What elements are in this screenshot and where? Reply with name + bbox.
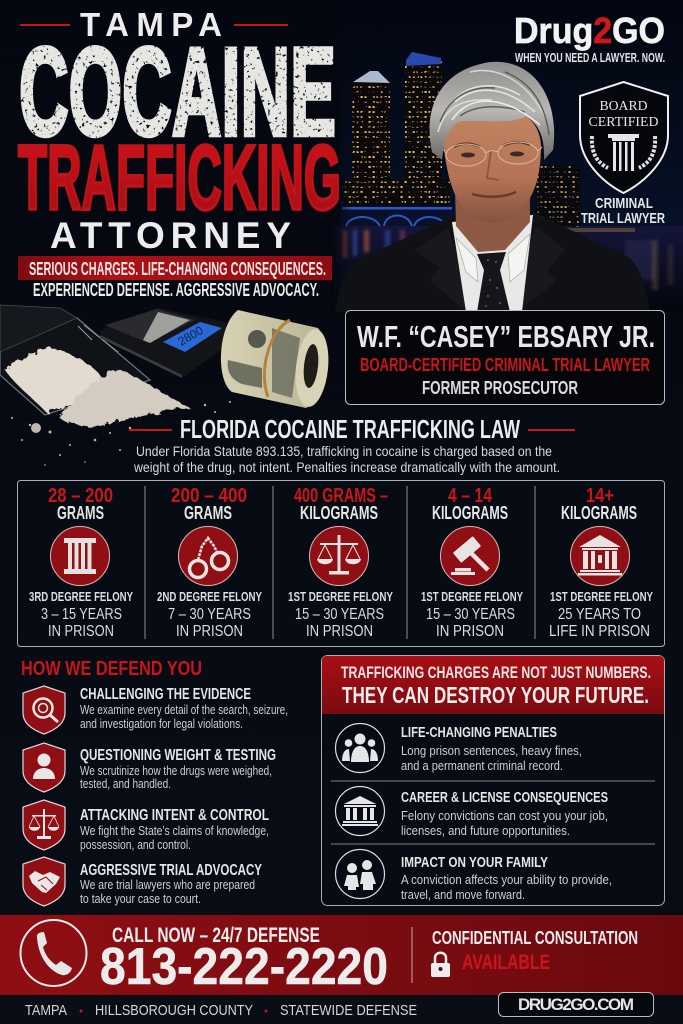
low buildings [342,165,635,232]
red tagline bar [18,256,332,280]
column: 400 grams-4 kilograms: 1ST DEGREE FELONY [288,589,393,604]
column: 400 grams-4 kilograms: KILOGRAMS [300,503,378,523]
logo: Drug2GO: Drug2GO [514,10,665,51]
defense item: challenging the evidence: We examine every detail of the search, seizure, [80,703,288,717]
column: 4-14 kilograms: IN PRISON [436,623,504,640]
icon: shield person [23,743,65,792]
blue bridge [342,206,452,226]
column: 14+ kilograms: 14+ [586,485,614,507]
available: AVAILABLE [462,951,550,974]
icon: scales [310,526,368,586]
water reflection [330,226,683,312]
consequence: career and license [336,786,608,838]
shirt collar shadow [456,234,530,282]
icon: phone [20,920,86,986]
consequence: life-changing penalties: LIFE-CHANGING PENALTIES [401,725,557,741]
call-to-action band [0,915,683,996]
photo: cocaine bag, scale and cash [0,305,332,466]
panel header [322,656,664,714]
column: 28-200 grams: 28 – 200 [48,485,113,507]
plastic bag [0,305,150,415]
column: 28-200 grams: 3 – 15 YEARS [41,606,122,623]
column: 200-400 grams: 200 – 400 [171,485,247,507]
consequence: impact on family: A conviction affects your ability to provide, [401,873,612,887]
column: 14+ kilograms: LIFE IN PRISON [549,623,650,640]
column icon [608,134,639,171]
defense item: questioning weight and testing: tested, and handled. [80,777,171,791]
service areas: HILLSBOROUGH COUNTY [95,1002,253,1019]
column: 400 grams-4 kilograms: IN PRISON [306,623,373,640]
icon: institution building [336,786,384,836]
defense item: challenging the evidence [23,686,288,734]
badge caption: CRIMINAL [595,195,653,212]
defense item: aggressive trial advocacy [23,857,262,906]
defense item: questioning weight and testing [23,743,276,792]
ATTORNEY heading: ATTORNEY [50,215,291,256]
red tagline bar: SERIOUS CHARGES. LIFE-CHANGING CONSEQUENCES. [29,259,326,279]
photo: Tampa night skyline [330,0,683,312]
icon: handcuffs [178,526,238,586]
shirt [452,215,533,312]
digital scale [100,308,228,378]
jacket [335,213,650,312]
section: how we defend you [21,657,288,906]
column: 4-14 kilograms: 4 – 14 [448,485,493,507]
consequence: life-changing penalties: and a permanent criminal record. [401,759,563,773]
column: 14+ kilograms: 25 YEARS TO [558,606,641,623]
website button: DRUG2GO.COM [518,995,634,1014]
face [443,107,541,223]
defense item: aggressive trial advocacy: We are trial lawyers who are prepared [80,878,255,892]
icon: padlock [431,953,450,977]
column: 28-200 grams: GRAMS [57,503,104,523]
footer [25,992,654,1019]
consequence: career and license: licenses, and future opportunities. [401,824,570,838]
facial features [454,142,530,197]
column: 28-200 grams: 3RD DEGREE FELONY [29,589,133,604]
former prosecutor: FORMER PROSECUTOR [422,378,578,398]
attorney portrait [335,62,650,312]
column: 400 grams-4 kilograms: 15 – 30 YEARS [295,606,384,623]
service areas: TAMPA [25,1002,67,1019]
consequence: life-changing penalties: Long prison sentences, heavy fines, [401,744,582,758]
laurels [592,136,655,168]
icon: courthouse [570,526,630,586]
section intro: Under Florida Statute 893.135, trafficking in cocaine is charged based on the [136,443,552,459]
glasses [443,142,542,166]
hair [430,62,554,160]
section: Florida cocaine trafficking law [129,414,575,475]
icon: shield magnifier [23,686,65,734]
column: 200-400 grams: 2ND DEGREE FELONY [157,589,262,604]
defense item: attacking intent and control: possession, and control. [80,838,191,852]
digital scale: 2800 [176,323,206,349]
column: 4-14 kilograms: 1ST DEGREE FELONY [421,589,523,604]
defense item: questioning weight and testing: QUESTIONING WEIGHT & TESTING [80,747,276,764]
tower right [405,52,442,208]
call now label: CALL NOW – 24/7 DEFENSE [112,924,320,947]
cash roll [221,310,332,408]
badge: board certified shield: CERTIFIED [588,115,658,130]
column: 200-400 grams: IN PRISON [176,623,243,640]
column: 200-400 grams: 7 – 30 YEARS [168,606,251,623]
icon: jail bars [50,526,110,586]
title block [18,6,341,300]
phone number: 813-222-2220 [100,938,388,996]
powder specks [11,401,231,466]
column: 4-14 kilograms [421,485,523,640]
consequence: impact on family: travel, and move forward. [401,888,525,902]
panel: consequences [322,656,664,906]
column: 28-200 grams [29,485,133,640]
section heading: HOW WE DEFEND YOU [21,657,202,680]
TAMPA heading: TAMPA [80,6,222,43]
defense item: attacking intent and control: We fight the State’s claims of knowledge, [80,824,269,838]
column: 28-200 grams: IN PRISON [48,623,114,640]
section intro: weight of the drug, not intent. Penalties increase dramatically with the amount. [133,459,560,475]
TRAFFICKING heading: TRAFFICKING [18,127,341,229]
section heading: FLORIDA COCAINE TRAFFICKING LAW [180,414,520,444]
defense item: attacking intent and control [23,800,269,852]
left fade [330,0,352,312]
badge: board certified shield [580,82,668,227]
tie [477,252,510,312]
tower left [352,71,390,208]
column: 200-400 grams [157,485,262,640]
column: 4-14 kilograms: 15 – 30 YEARS [426,606,515,623]
column: 400 grams-4 kilograms [288,485,393,640]
badge caption [581,195,665,227]
tagline second line: EXPERIENCED DEFENSE. AGGRESSIVE ADVOCACY. [33,280,319,300]
service areas: STATEWIDE DEFENSE [280,1002,417,1019]
service areas [25,1002,417,1019]
icon: gavel [440,526,500,586]
icon: shield scales [23,800,65,850]
panel: penalty table [18,480,664,646]
defense item: challenging the evidence: CHALLENGING THE EVIDENCE [80,686,251,703]
neck [455,190,530,252]
lapels [415,226,565,312]
column: 14+ kilograms: KILOGRAMS [561,503,637,523]
powder [5,347,190,427]
icon: shield handshake [23,857,65,906]
consequence: life-changing penalties [336,724,582,773]
defense item: questioning weight and testing: We scrutinize how the drugs were weighed, [80,764,272,778]
COCAINE heading: COCAINE [19,23,336,162]
consequence: career and license: CAREER & LICENSE CONSEQUENCES [401,790,608,806]
panel: attorney name [346,310,664,404]
consequence: impact on family: IMPACT ON YOUR FAMILY [401,855,548,871]
column: 14+ kilograms [549,485,653,640]
icon: family figures [336,850,384,898]
column: 4-14 kilograms: KILOGRAMS [432,503,508,523]
website button [498,992,654,1016]
consequence: impact on family [336,850,612,902]
icon: group of people [336,724,384,772]
section intro [133,443,560,475]
hair strands [438,71,549,135]
defense item: challenging the evidence: and investigation for legal violations. [80,717,243,731]
defense item: attacking intent and control: ATTACKING INTENT & CONTROL [80,807,269,824]
shield [580,82,668,193]
column: 200-400 grams: GRAMS [184,503,232,523]
column: 400 grams-4 kilograms: 400 GRAMS – [294,485,388,507]
consequence: career and license: Felony convictions can cost you your job, [401,809,608,823]
defense item: aggressive trial advocacy: to take your case to court. [80,892,201,906]
shield text: BOARD [600,99,648,114]
defense item: aggressive trial advocacy: AGGRESSIVE TRIAL ADVOCACY [80,862,262,879]
